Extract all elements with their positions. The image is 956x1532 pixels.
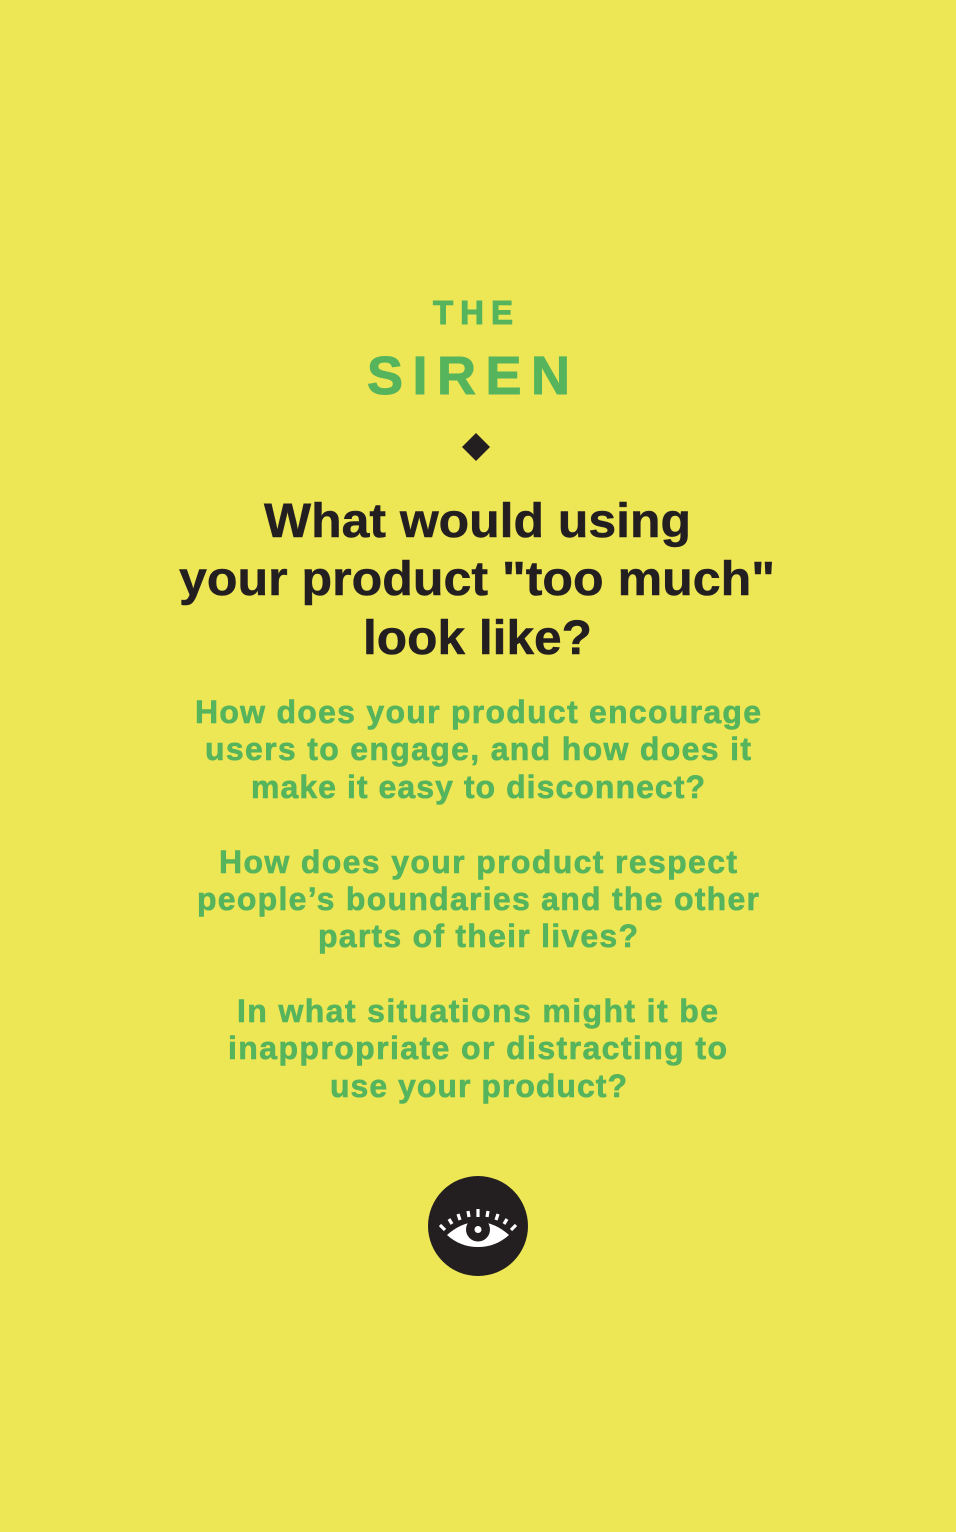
question: inappropriate situations: In what situations might it be bbox=[237, 993, 718, 1029]
title: the siren: THE bbox=[433, 294, 513, 331]
title: the siren bbox=[367, 294, 570, 406]
question: boundaries: parts of their lives? bbox=[318, 918, 638, 954]
question: boundaries: people’s boundaries and the other bbox=[197, 881, 759, 917]
icon: diamond bbox=[462, 433, 490, 461]
title: the siren: SIREN bbox=[367, 346, 570, 406]
question: encourage and disconnect: users to engage, and how does it bbox=[205, 731, 751, 767]
question: encourage and disconnect: make it easy to disconnect? bbox=[251, 769, 705, 805]
question: inappropriate situations: use your product? bbox=[330, 1068, 627, 1104]
question: boundaries: How does your product respect bbox=[219, 844, 737, 880]
heading bbox=[179, 495, 775, 665]
question: encourage and disconnect: How does your product encourage bbox=[195, 694, 761, 730]
question: inappropriate situations bbox=[228, 993, 727, 1104]
icon: eye badge bbox=[428, 1176, 528, 1276]
heading: What would using bbox=[264, 495, 691, 548]
heading: your product "too much" bbox=[179, 553, 775, 606]
question: boundaries bbox=[197, 844, 759, 954]
question: encourage and disconnect bbox=[195, 694, 761, 805]
question: inappropriate situations: inappropriate or distracting to bbox=[228, 1030, 727, 1066]
heading: look like? bbox=[363, 612, 592, 665]
